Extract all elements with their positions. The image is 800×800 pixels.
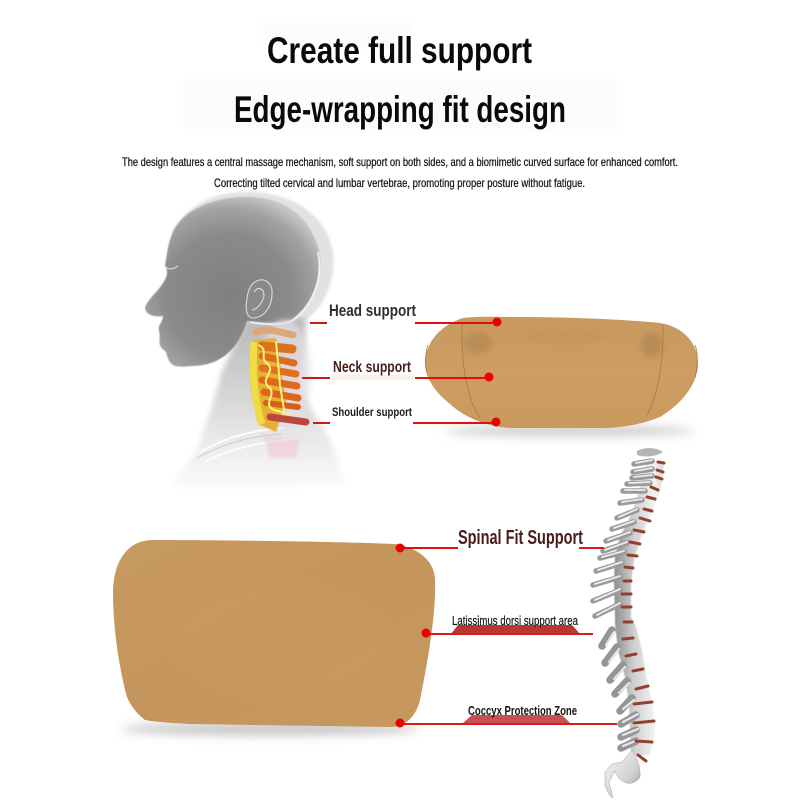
callout: latissimus dorsi support area: Latissimus dorsi support area <box>452 613 579 628</box>
figure: human head and neck <box>145 192 344 489</box>
spinal column <box>614 458 664 755</box>
process highlights <box>595 460 652 615</box>
sacrum and coccyx <box>605 750 640 798</box>
callout: head support: Head support <box>329 301 416 320</box>
lumbar pillow <box>113 540 435 727</box>
callout: neck support <box>302 359 494 382</box>
head halo <box>172 192 333 326</box>
spine top cap <box>637 448 663 456</box>
icon: ear <box>246 280 272 318</box>
description text: Correcting tilted cervical and lumbar vertebrae, promoting proper posture without fatigue. <box>214 176 585 190</box>
title <box>234 30 566 130</box>
spine illustration <box>593 448 664 798</box>
pillow shadow: neck pillow <box>445 426 695 436</box>
lower processes <box>602 630 636 748</box>
spinous processes <box>593 461 652 616</box>
callout: shoulder support: Shoulder support <box>332 405 412 419</box>
description text <box>122 155 678 190</box>
faint ghost background behind title <box>182 18 622 130</box>
lower process highlights <box>606 632 638 746</box>
callout: coccyx protection zone: Coccyx Protection Zone <box>468 703 577 718</box>
title: Create full support <box>267 30 532 71</box>
callout: latissimus dorsi support area <box>422 613 593 638</box>
intervertebral discs <box>622 462 664 761</box>
neck and shoulders <box>170 318 344 489</box>
title: Edge-wrapping fit design <box>234 89 566 130</box>
pillow shadow: lumbar pillow <box>120 723 420 735</box>
callout: head support <box>310 301 502 326</box>
neck pillow <box>425 317 698 428</box>
head and face <box>145 197 320 367</box>
callout: neck support: Neck support <box>333 359 412 376</box>
callout: spinal fit support <box>396 527 604 552</box>
callout: shoulder support <box>313 405 500 426</box>
callout: spinal fit support: Spinal Fit Support <box>458 527 583 549</box>
callout: coccyx protection zone <box>396 703 617 728</box>
cervical spine highlight <box>250 319 311 458</box>
